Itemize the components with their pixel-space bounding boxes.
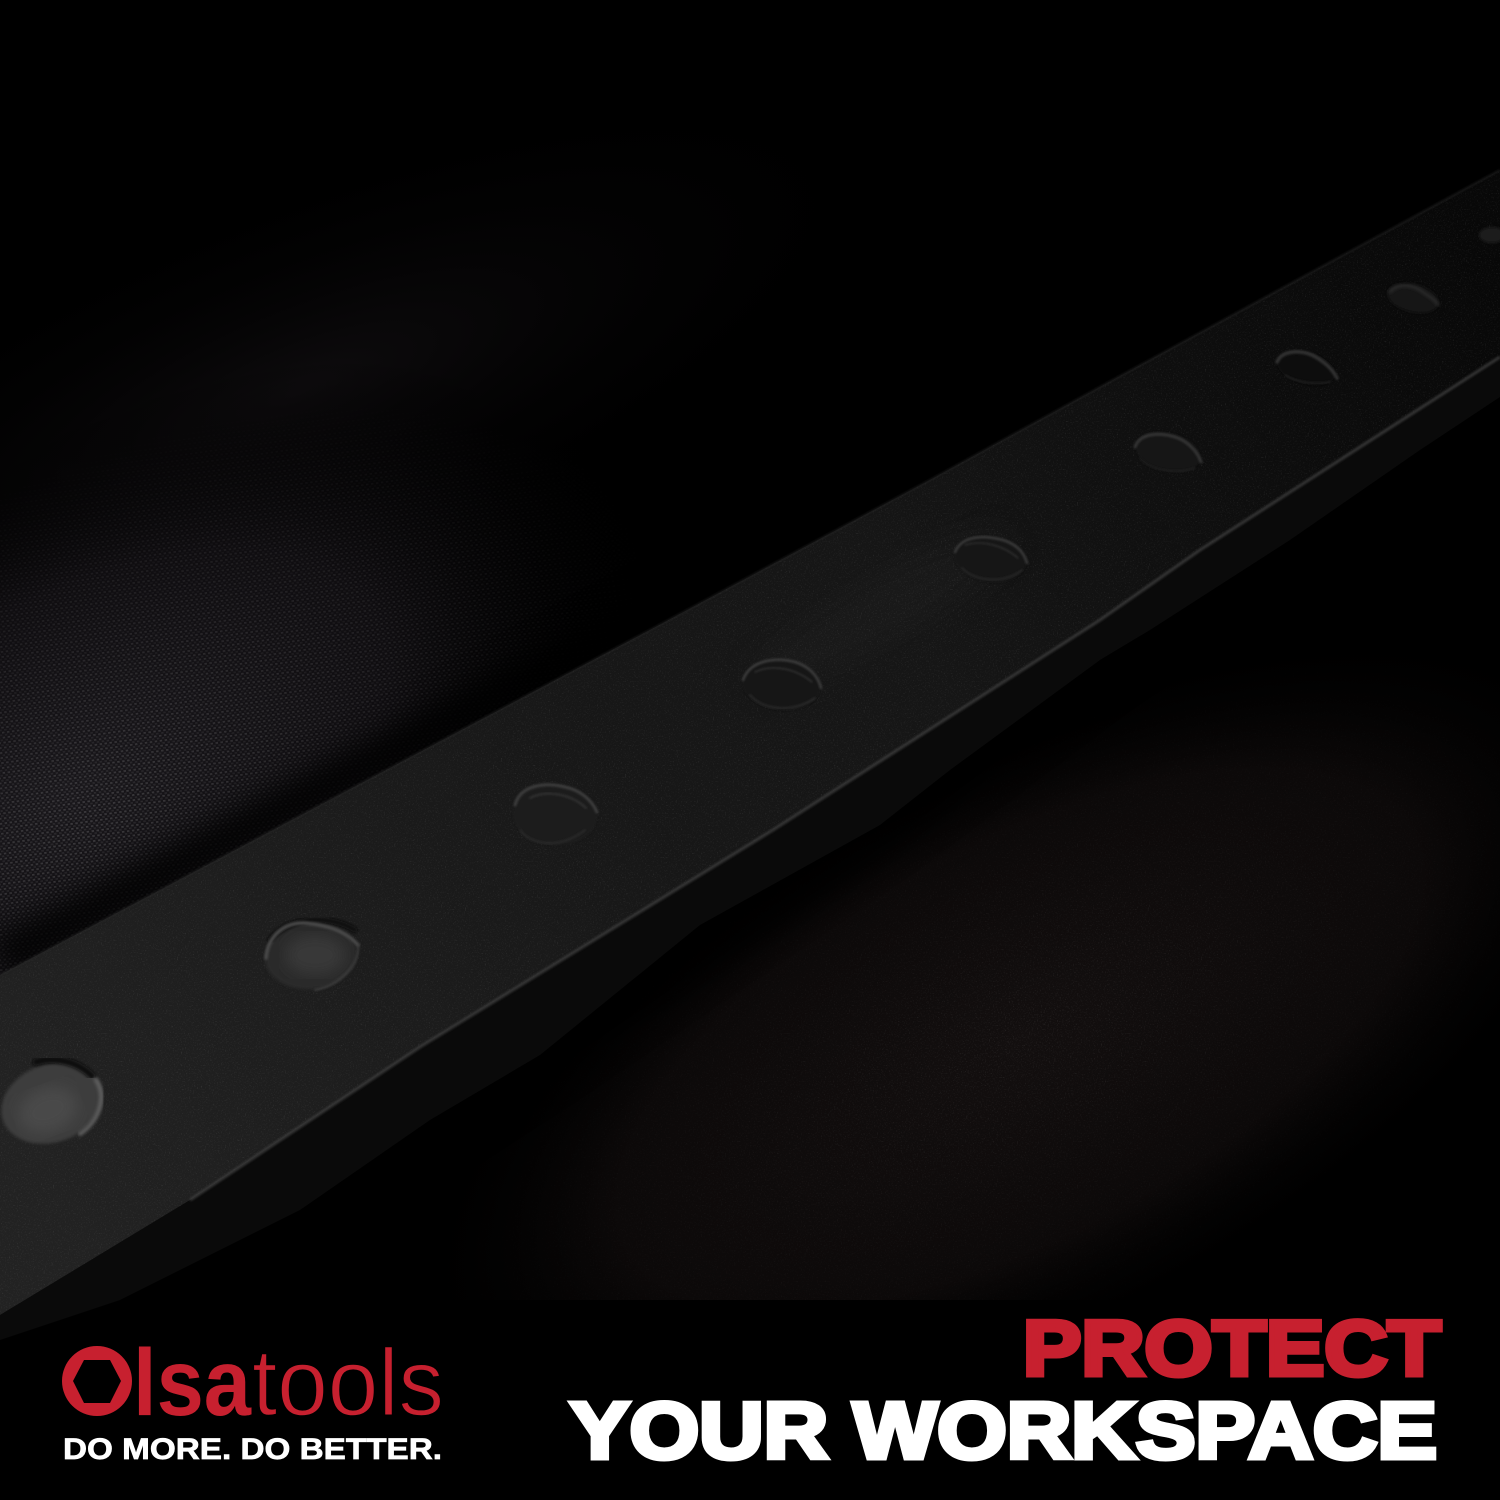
- stud 9: [1479, 227, 1500, 243]
- stud 6: [1131, 426, 1205, 478]
- stud 2: [262, 918, 360, 994]
- stud 5: [951, 531, 1029, 587]
- logo wordmark light: tools: [252, 1330, 444, 1436]
- rubber strip: top face: [0, 170, 1500, 1315]
- stud 8: [1384, 278, 1442, 318]
- icon: hex nut letter O: [62, 1346, 132, 1416]
- background: dark fabric surface: [0, 312, 1491, 1300]
- headline: PROTECT: PROTECT: [1023, 1304, 1441, 1392]
- headline: YOUR WORKSPACE: YOUR WORKSPACE: [570, 1386, 1437, 1475]
- strip studs: [0, 227, 1500, 1157]
- tagline: DO MORE. DO BETTER.: [63, 1433, 442, 1466]
- rubber strip: side face: [0, 357, 1500, 1340]
- stud 4: [739, 655, 823, 715]
- logo: Olsatools: [62, 1330, 444, 1436]
- stud 1: [0, 1049, 114, 1157]
- stud 7: [1273, 344, 1339, 392]
- stud 3: [511, 782, 599, 848]
- logo wordmark bold: lsa: [133, 1330, 252, 1436]
